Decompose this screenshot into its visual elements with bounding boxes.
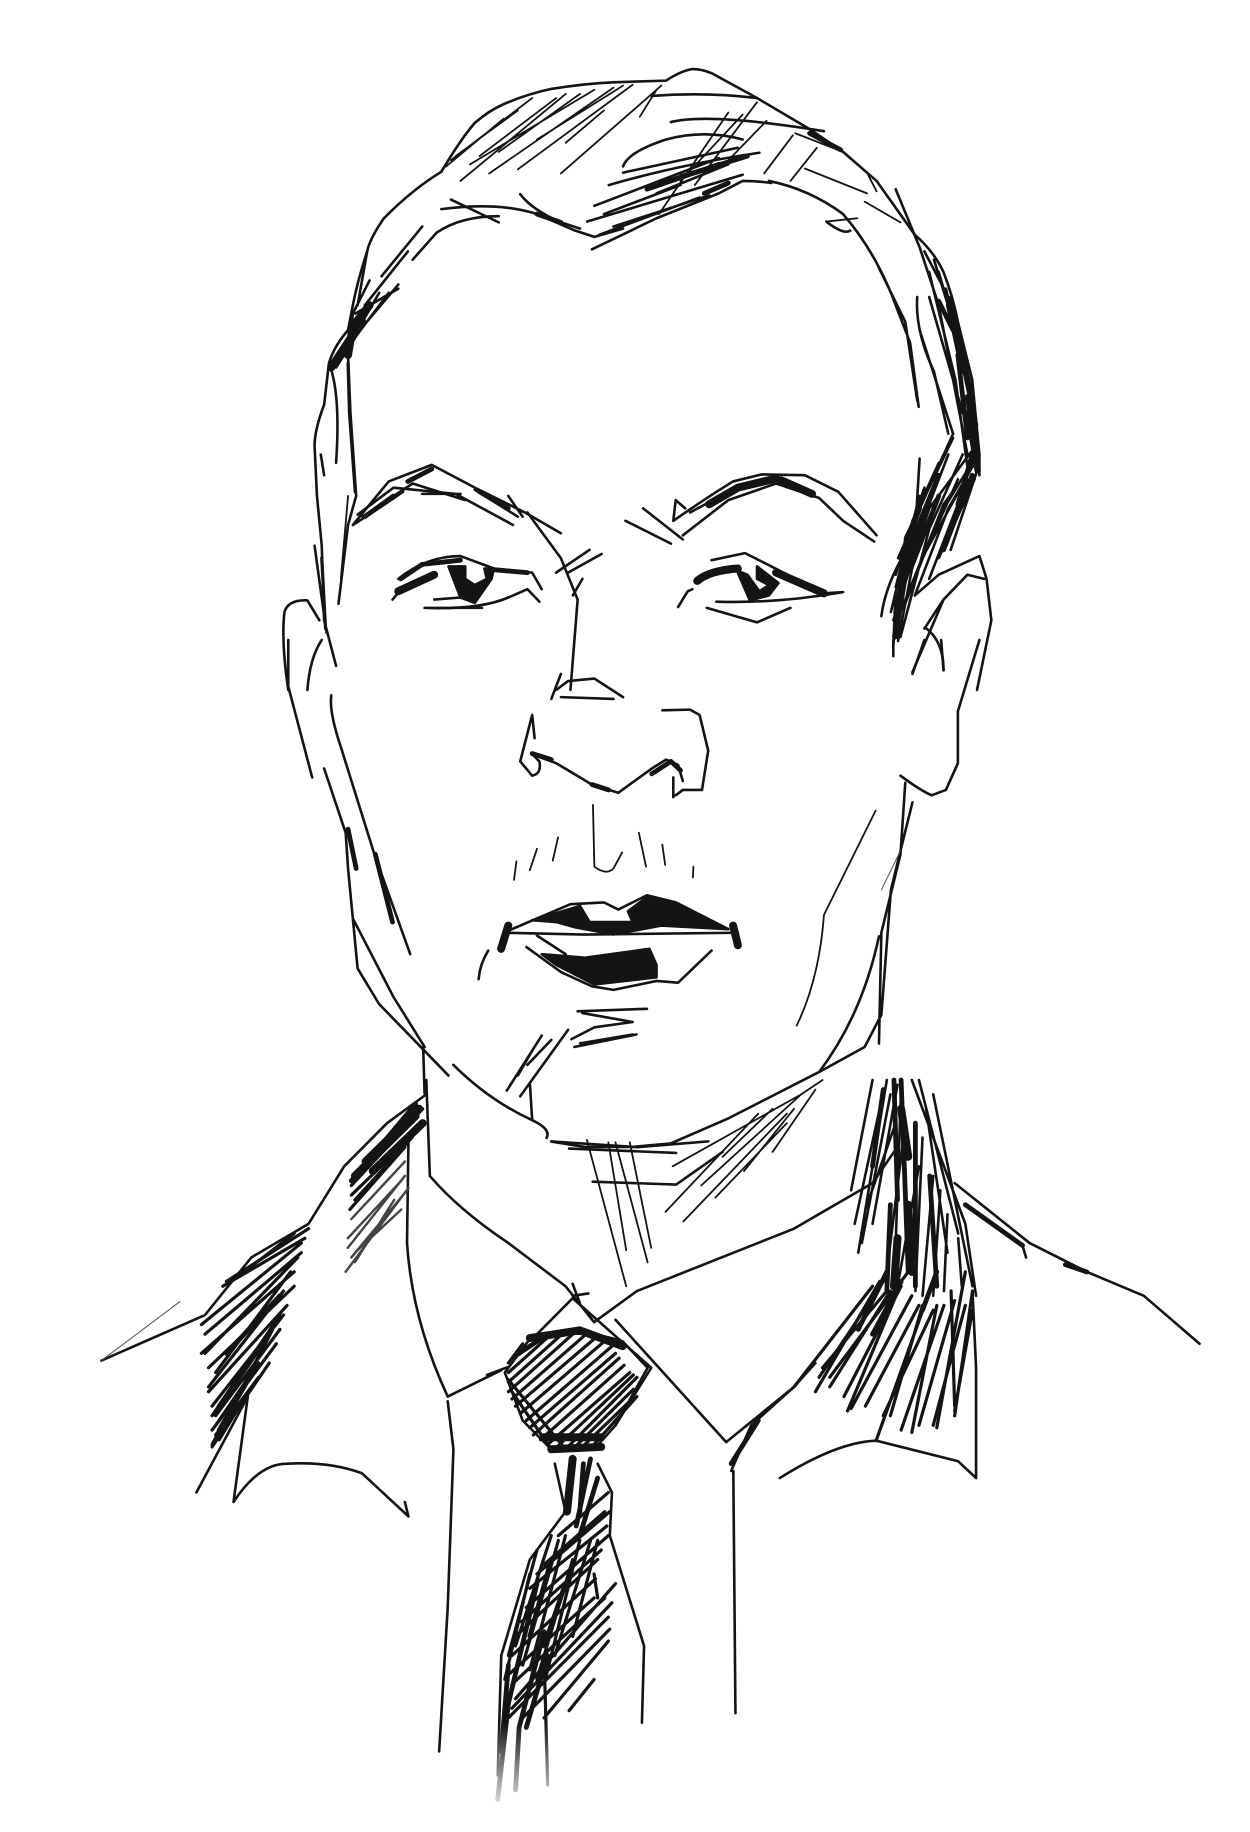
nose: [520, 674, 708, 797]
right jacket fan hatching: [794, 1272, 972, 1441]
right side hair: [881, 189, 979, 645]
right ear lobe: [893, 640, 979, 795]
tie fade: [480, 1723, 566, 1819]
left eye: [393, 556, 542, 608]
left jaw: [288, 640, 448, 1093]
lower jaw and neck: [453, 783, 912, 1147]
philtrum and moustache marks: [514, 805, 693, 880]
hair outline: [315, 69, 979, 620]
left eyebrow: [353, 465, 561, 533]
right lapel shading: [851, 1080, 976, 1296]
right jacket: [731, 1183, 1200, 1713]
right ear: [912, 556, 991, 690]
right eye: [678, 553, 843, 622]
left jacket shoulder: [101, 1094, 453, 1751]
chin marks: [507, 1009, 647, 1120]
tie knot: [487, 1330, 648, 1449]
hairline: [413, 181, 919, 407]
nose bridge: [527, 513, 602, 690]
neck, collar and jacket: [101, 1080, 1200, 1819]
lower face: [288, 640, 979, 1147]
tie blade: [498, 1459, 644, 1799]
neck hatching: [551, 1080, 823, 1286]
upper head: [283, 69, 991, 690]
collar: [426, 1080, 894, 1442]
left ear: [283, 600, 319, 690]
mouth: [479, 895, 738, 990]
right cheek line: [797, 811, 876, 1026]
hair hatching: [446, 85, 900, 249]
left temple hair: [315, 227, 422, 666]
left jacket hatching: [201, 1229, 308, 1447]
right eyebrow: [625, 474, 877, 544]
left lapel shading: [346, 1104, 423, 1272]
